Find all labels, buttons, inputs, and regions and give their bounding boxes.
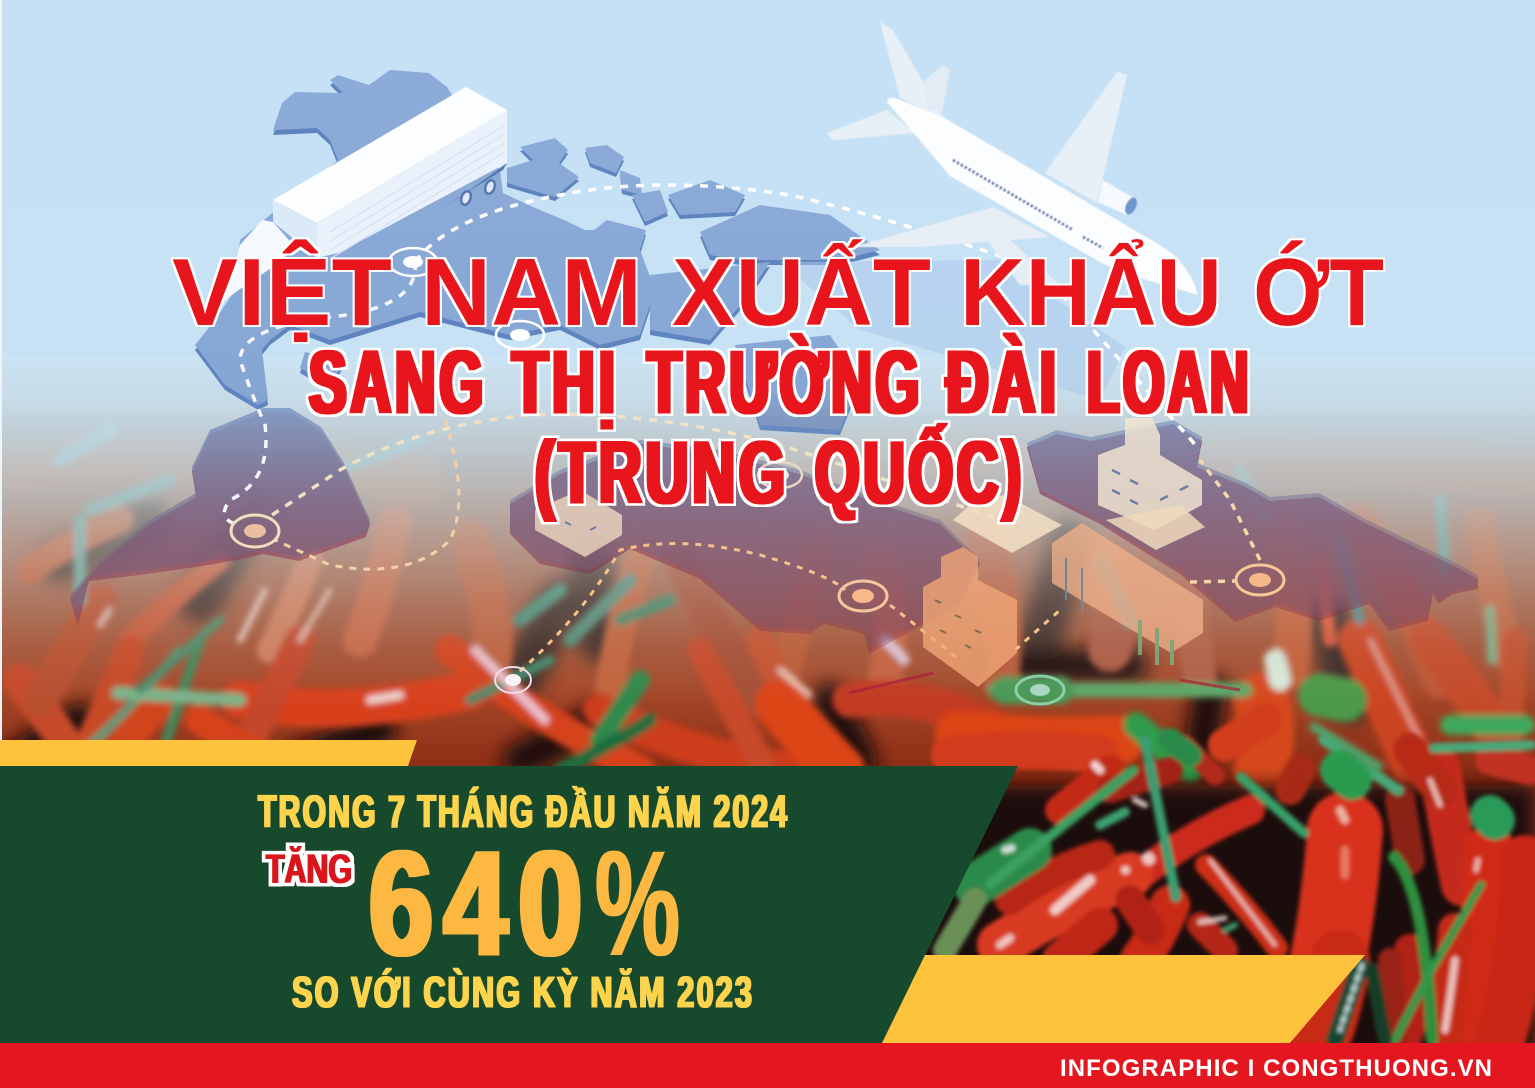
stems and caps <box>975 850 1030 885</box>
title line 1: VIỆT <box>172 238 392 346</box>
map: pale land ghost <box>780 260 1125 400</box>
icon: airplane <box>827 22 1198 295</box>
photo: blurred chillies, upper field <box>0 360 1535 1050</box>
title line 1: NAM <box>421 239 642 346</box>
text: period: TRONG 7 THÁNG ĐẦU NĂM 2024 <box>258 786 789 837</box>
map: asia east and oceania <box>1027 420 1478 627</box>
number: 640%: 640 <box>369 819 593 987</box>
world map <box>70 70 1478 704</box>
title line 2: SANG <box>309 333 487 433</box>
stems <box>160 640 200 760</box>
title line 1: ỚT <box>1253 239 1384 346</box>
yellow band lower right <box>882 955 1365 1043</box>
label: tăng: TĂNG <box>266 845 352 892</box>
icon: container truck <box>225 87 507 300</box>
title line 2: TRƯỜNG <box>647 332 923 433</box>
text: comparison: SO VỚI CÙNG KỲ NĂM 2023 <box>292 967 754 1017</box>
title line 1 <box>172 238 1384 346</box>
title line 2: LOAN <box>1087 333 1252 433</box>
title line 2 <box>309 332 1252 433</box>
title line 3: (TRUNG <box>535 422 789 522</box>
icon: cargo pallets and containers <box>535 418 1205 687</box>
title <box>172 238 1384 522</box>
title line 1: KHẨU <box>960 238 1222 346</box>
yellow band top left <box>0 740 417 766</box>
title line 2: THỊ <box>512 333 619 433</box>
footer source text: INFOGRAPHIC I CONGTHUONG.VN <box>1060 1055 1492 1082</box>
map: eurasia north <box>650 205 880 430</box>
left white edge <box>0 0 2 740</box>
highlights <box>1000 765 1478 1030</box>
map: africa and europe lower <box>510 440 980 650</box>
title line 2: ĐÀI <box>946 332 1060 433</box>
highlights <box>100 590 330 640</box>
map: south america <box>70 408 370 622</box>
title line 1: XUẤT <box>672 238 931 346</box>
panel: green statistic <box>0 766 1018 1044</box>
route nodes <box>231 248 1284 704</box>
map: arctic islands <box>507 138 745 222</box>
title line 3: QUỐC) <box>815 422 1025 522</box>
fade: sky mist over chillies <box>0 355 1535 705</box>
map: north america <box>195 70 655 405</box>
dashed shipping routes <box>224 185 1260 680</box>
footer bar <box>0 1043 1535 1088</box>
photo: sharp chillies at lower right <box>900 720 1535 1060</box>
number: 640%: % <box>595 819 680 987</box>
map: lower outline <box>849 673 1240 693</box>
